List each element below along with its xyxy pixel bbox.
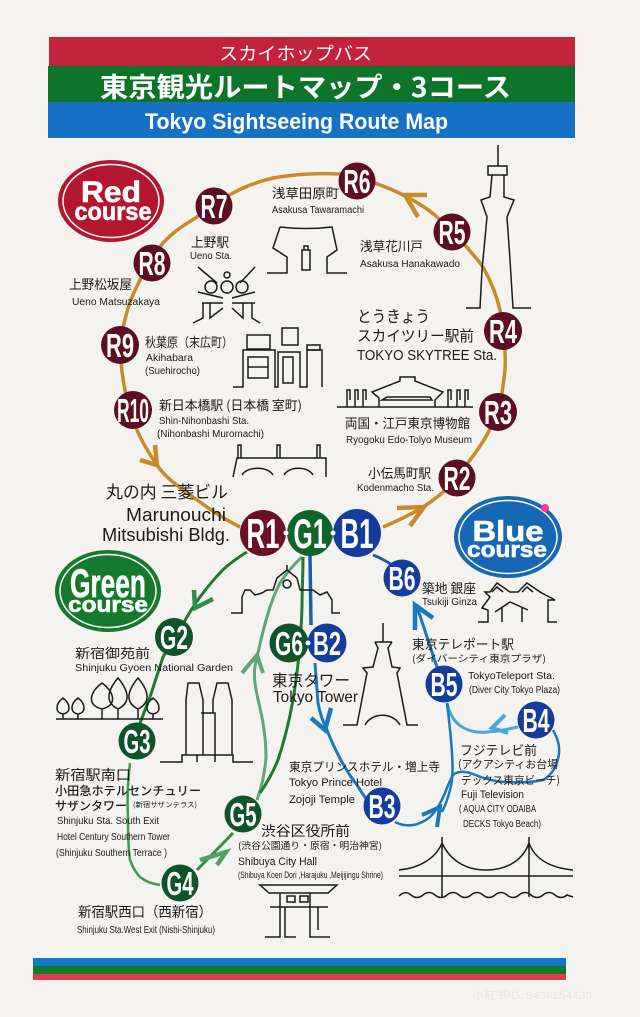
icon: Edo-Tokyo Museum [337,377,473,407]
station markers: R9 [106,327,134,364]
red course station labels: Akihabara [146,353,193,364]
header banner: スカイホップバス [219,40,372,66]
red course station labels: Shin-Nihonbashi Sta. [159,416,249,427]
blue course station labels: 築地 銀座 [422,578,476,597]
red course station labels: Kodenmacho Sta. [357,483,434,494]
icon: Tokyo Tower [343,623,418,725]
red course station labels: Asakusa Hanakawado [360,259,460,270]
blue route lines [310,555,559,827]
station markers: R4 [489,313,517,350]
red course station labels: TOKYO SKYTREE Sta. [357,347,497,364]
blue course station labels: (アクアシティお台場 [458,756,558,772]
red course station labels: 小伝馬町駅 [368,463,431,482]
icon: Tsukiji Ginza [478,583,557,622]
blue course station labels: 東京タワー [272,667,350,691]
red course station labels: Asakusa Tawaramachi [272,205,364,216]
red course station labels [69,183,497,545]
red course station labels: (Nihonbashi Muromachi) [157,429,264,440]
red course station labels: 両国・江戸東京博物館 [345,413,470,432]
green course station labels: Shinjuku Gyoen National Garden [75,663,233,674]
station markers: G2 [160,619,188,656]
badge: green course: Green [70,562,146,606]
station markers: B5 [430,666,458,703]
header banner [48,37,575,138]
icon: Shinjuku towers [160,683,253,762]
station markers: R2 [444,460,470,497]
red course station labels: Ryogoku Edo-Tolyo Museum [346,434,472,446]
station markers: B4 [522,702,550,739]
red course station labels: Ueno Matsuzakaya [72,297,160,308]
green course station labels: (Shinjuku Southern Terrace ) [56,848,167,859]
badge: blue course [454,496,562,578]
green route lines [128,552,303,885]
station markers: R3 [484,394,512,431]
red course station labels: 上野松坂屋 [69,274,132,293]
station markers: R7 [200,188,228,225]
red course station labels: 上野駅 [191,232,229,251]
icon: Tokyo Skytree [466,145,531,308]
icon: Akihabara buildings [233,328,322,387]
blue course station labels: 東京テレポート駅 [412,634,514,653]
blue course station labels: DECKS Tokyo Beach) [463,819,541,830]
red course station labels: 丸の内 三菱ビル [106,478,228,503]
green course station labels: Shinjuku Sta.West Exit (Nishi-Shinjuku) [77,925,215,936]
icon: Sensoji gate [267,227,347,273]
badge: green course [55,550,161,632]
blue course station labels: Zojoji Temple [289,794,355,806]
badge: red course: course [74,198,152,226]
blue course station labels: (ダイバーシティ東京プラザ) [412,651,546,665]
blue course station labels: ( AQUA CITY ODAIBA [459,804,536,815]
blue course station labels [272,578,560,830]
red course station labels: スカイツリー駅前 [357,325,474,346]
red course station labels: Marunouchi [126,505,226,525]
green course station labels: (新宿サザンテラス) [133,800,197,810]
red course station labels: 秋葉原（末広町） [145,332,233,351]
station markers: R5 [438,214,466,251]
red course station labels: とうきょう [357,303,430,327]
blue course station labels: Fuji Television [461,789,524,801]
green course station labels: 小田急ホテルセンチュリー [55,782,201,799]
red course station labels: Mitsubishi Bldg. [102,525,230,545]
green course station labels [55,643,383,936]
badge: blue course: course [467,537,547,562]
badge: blue course: Blue [472,516,544,548]
red route line [121,174,505,527]
header banner: Tokyo Sightseeing Route Map [145,109,448,134]
station markers: R6 [344,163,370,200]
red course station labels: 新日本橋駅 (日本橋 室町) [159,395,302,414]
icon: torii gate [260,885,337,937]
badge: red course [58,160,164,242]
station markers: B1 [340,510,374,557]
icon: Nihonbashi bridge [233,445,326,477]
blue course station labels: 東京プリンスホテル・増上寺 [289,758,440,775]
station markers: G6 [275,625,303,662]
green course station labels: Hotel Century Southern Tower [57,832,171,843]
station markers: B6 [388,560,416,597]
station markers: G5 [230,796,256,833]
green course station labels: (渋谷公園通り・原宿・明治神宮) [238,838,382,852]
green course station labels: 渋谷区役所前 [261,821,350,841]
red course station labels: 浅草田原町 [272,183,339,202]
station markers: R8 [138,245,166,282]
green course station labels: Shibuya City Hall [238,856,317,868]
station markers [101,162,554,902]
watermark: 小紅书ID: 9436154430 [472,988,592,1002]
blue course station labels: Tsukiji Ginza [422,597,477,608]
badge: red course: Red [81,176,141,209]
station markers: R10 [117,392,149,429]
icon: Ueno station [193,267,260,323]
icon: Tokyo Station [231,565,340,613]
icon: park trees [56,678,163,719]
red course station labels: Ueno Sta. [190,251,232,262]
station markers: G1 [294,510,326,557]
green course station labels: Shinjuku Sta. South Exit [57,815,159,827]
green course station labels: (Shibuya Koen Dori ,Harajuku ,Meijijingu Shrine) [238,870,383,880]
green course station labels: 新宿駅西口（西新宿） [78,902,212,922]
blue course station labels: Tokyo Tower [273,689,359,706]
blue course station labels: フジテレビ前 [460,740,537,759]
icon: Rainbow Bridge [399,837,573,898]
station markers: G4 [166,865,194,902]
red course station labels: (Suehirocho) [145,366,200,377]
green course station labels: 新宿御苑前 [75,643,150,662]
blue course station labels: TokyoTeleport Sta. [468,671,555,682]
badge: green course: course [68,592,148,617]
station markers: B2 [313,625,341,662]
station markers: G3 [124,723,150,760]
blue course station labels: デックス東京ビーチ) [461,772,560,788]
station markers: R1 [246,510,280,557]
blue course station labels: Tokyo Prince Hotel [289,777,382,789]
header banner: 東京観光ルートマップ・3コース [100,66,511,105]
footer colour band [33,958,566,980]
blue course station labels: (Diver City Tokyo Plaza) [469,685,560,696]
green course station labels: 新宿駅南口 [55,765,131,785]
station markers: B3 [368,788,396,825]
green course station labels: サザンタワー [55,797,127,814]
red course station labels: 浅草花川戸 [360,236,423,255]
